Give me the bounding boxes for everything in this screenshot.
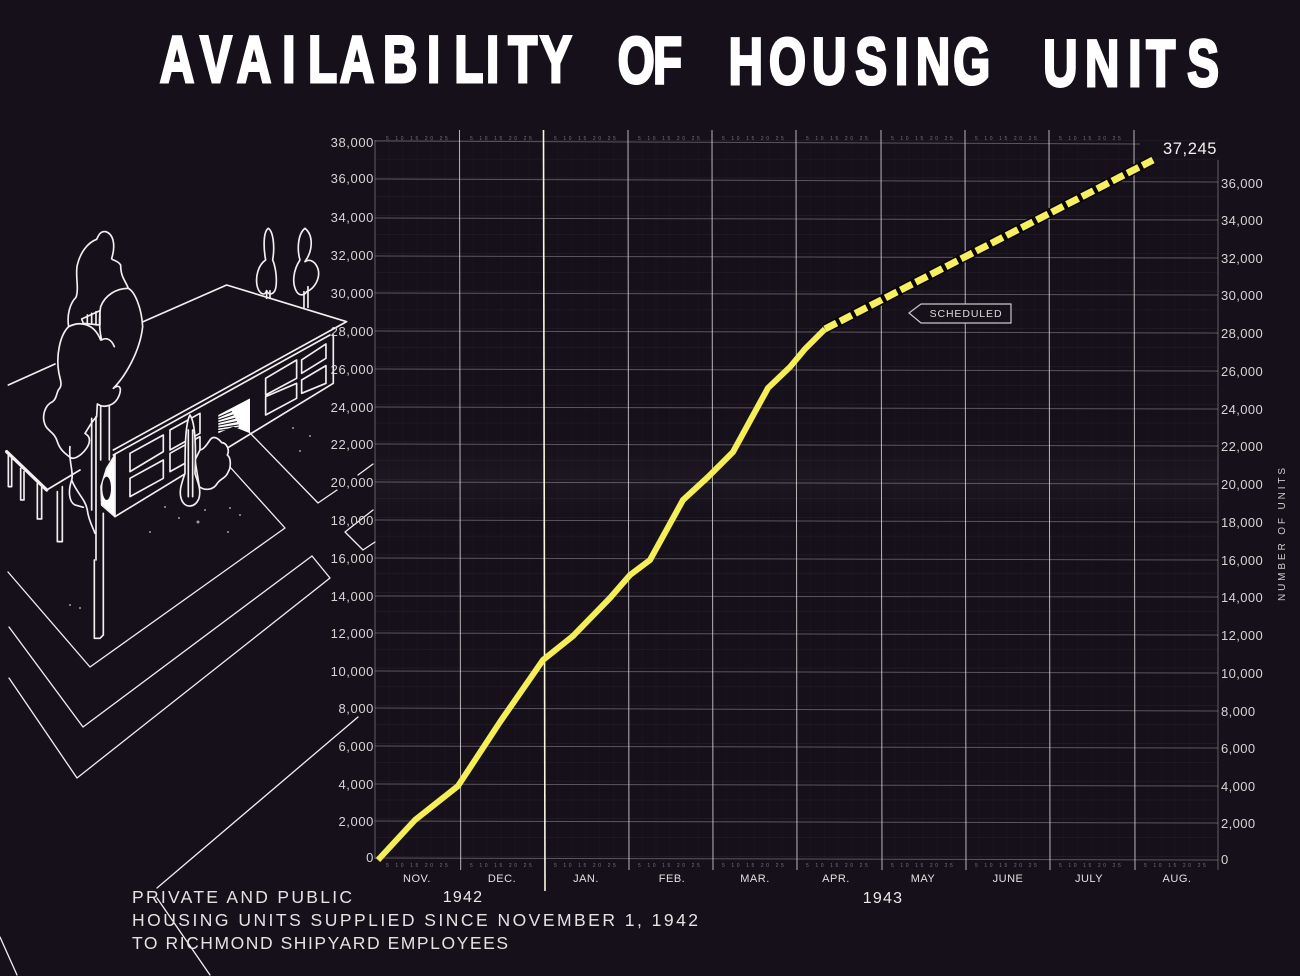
left axis labels: 18,000 <box>331 513 374 528</box>
left axis labels: 4,000 <box>338 777 374 792</box>
right axis labels: 30,000 <box>1221 288 1263 303</box>
caption: HOUSING UNITS SUPPLIED SINCE NOVEMBER 1, 1942 <box>132 910 698 930</box>
top day ticks: 5 10 15 20 25 <box>806 136 870 142</box>
bottom day ticks <box>386 863 1208 869</box>
month labels: JAN. <box>573 873 599 885</box>
title: OF <box>618 24 682 98</box>
right axis labels: 26,000 <box>1221 364 1263 379</box>
end wall <box>101 455 115 517</box>
right axis labels: 32,000 <box>1221 251 1263 266</box>
bottom day ticks: 5 10 15 20 25 <box>1059 863 1123 869</box>
top day ticks: 5 10 15 20 25 <box>891 136 955 142</box>
right axis labels: 6,000 <box>1221 741 1256 756</box>
right axis labels: 10,000 <box>1221 666 1263 681</box>
left axis labels: 8,000 <box>338 701 374 716</box>
right axis labels: 34,000 <box>1221 213 1263 228</box>
top day ticks: 5 10 15 20 25 <box>722 136 786 142</box>
month labels: DEC. <box>488 873 516 885</box>
trunks <box>92 407 109 560</box>
right axis labels: 8,000 <box>1221 704 1256 719</box>
top day ticks: 5 10 15 20 25 <box>554 136 618 142</box>
bottom day ticks: 5 10 15 20 25 <box>470 863 534 869</box>
caption <box>132 887 698 953</box>
month labels: MAY <box>911 873 935 885</box>
bottom day ticks: 5 10 15 20 25 <box>554 863 618 869</box>
month labels: JULY <box>1075 873 1103 885</box>
title: UNITS <box>1043 27 1219 101</box>
top day ticks: 5 10 15 20 25 <box>975 136 1039 142</box>
left axis labels: 28,000 <box>331 324 374 339</box>
right axis labels: 14,000 <box>1221 590 1263 605</box>
year label 1942: 1942 <box>443 889 483 906</box>
left axis labels: 14,000 <box>331 589 374 604</box>
top day ticks: 5 10 15 20 25 <box>470 136 534 142</box>
bottom day ticks: 5 10 15 20 25 <box>891 863 955 869</box>
small tree by door <box>195 437 230 489</box>
top day ticks: 5 10 15 20 25 <box>1059 136 1123 142</box>
title <box>160 23 1219 101</box>
house body <box>7 228 347 638</box>
right axis labels: 20,000 <box>1221 477 1263 492</box>
right axis labels: 4,000 <box>1221 779 1256 794</box>
left axis labels: 10,000 <box>331 664 374 679</box>
eave second line <box>113 335 333 517</box>
actual units line <box>378 329 825 860</box>
month labels: FEB. <box>659 873 685 885</box>
bottom day ticks: 5 10 15 20 25 <box>806 863 870 869</box>
right axis labels: 16,000 <box>1221 553 1263 568</box>
right axis labels: 2,000 <box>1221 816 1256 831</box>
windows <box>130 344 326 497</box>
left axis labels: 24,000 <box>331 400 374 415</box>
left axis labels: 20,000 <box>331 475 374 490</box>
month labels: AUG. <box>1163 873 1191 885</box>
right axis labels: 0 <box>1221 852 1229 867</box>
walkway outlines <box>0 433 375 975</box>
illustration: isometric house with trees and walkways <box>0 228 375 975</box>
title: HOUSING <box>729 25 990 99</box>
roof outline <box>8 285 347 490</box>
left axis labels: 34,000 <box>331 210 374 225</box>
right axis labels: 36,000 <box>1221 176 1263 191</box>
caption: PRIVATE AND PUBLIC <box>132 887 352 907</box>
bottom day ticks: 5 10 15 20 25 <box>386 863 450 869</box>
end wall round opening <box>102 477 111 500</box>
right axis labels: 28,000 <box>1221 326 1263 341</box>
scheduled tag <box>909 304 1011 323</box>
foreground tree canopy <box>44 232 143 458</box>
left axis labels: 12,000 <box>331 626 374 641</box>
left axis labels: 36,000 <box>331 171 374 186</box>
right axis labels: 22,000 <box>1221 439 1263 454</box>
month labels: APR. <box>822 873 850 885</box>
left axis labels: 6,000 <box>338 739 374 754</box>
right axis labels: 24,000 <box>1221 402 1263 417</box>
bottom day ticks: 5 10 15 20 25 <box>638 863 702 869</box>
left axis labels: 32,000 <box>331 248 374 263</box>
caption: TO RICHMOND SHIPYARD EMPLOYEES <box>132 933 508 953</box>
bottom day ticks: 5 10 15 20 25 <box>722 863 786 869</box>
right axis labels: 18,000 <box>1221 515 1263 530</box>
left axis labels: 0 <box>366 850 374 865</box>
month labels <box>403 873 1191 885</box>
left axis labels: 30,000 <box>331 286 374 301</box>
month labels: MAR. <box>740 873 770 885</box>
major horizontal grid lines <box>375 141 1218 860</box>
low shrub around trunk <box>69 447 95 533</box>
fascia and posts <box>7 452 47 490</box>
month grid lines <box>375 130 1218 870</box>
left axis labels: 2,000 <box>338 814 374 829</box>
end value label: 37,245 <box>1163 140 1217 158</box>
minor grid <box>375 140 1218 859</box>
right axis labels <box>1221 176 1263 867</box>
canopy inner lines <box>69 288 128 347</box>
right axis title: NUMBER OF UNITS <box>1277 468 1288 601</box>
back trees <box>257 228 276 294</box>
bottom day ticks: 5 10 15 20 25 <box>1144 863 1208 869</box>
left axis labels <box>331 135 374 865</box>
left axis labels: 16,000 <box>331 551 374 566</box>
trunk base <box>94 560 103 638</box>
left axis labels: 38,000 <box>331 135 374 150</box>
month labels: NOV. <box>403 873 431 885</box>
year label 1943: 1943 <box>863 890 903 907</box>
right axis labels: 12,000 <box>1221 628 1263 643</box>
month labels: JUNE <box>993 873 1023 885</box>
year divider <box>544 130 545 891</box>
bottom day ticks: 5 10 15 20 25 <box>975 863 1039 869</box>
scheduled tag: SCHEDULED <box>930 308 1002 320</box>
chart: housing units over time <box>331 130 1288 907</box>
lawn specks <box>69 427 311 609</box>
left axis labels: 22,000 <box>331 437 374 452</box>
top day ticks <box>386 136 1123 142</box>
top day ticks: 5 10 15 20 25 <box>386 136 450 142</box>
doorway <box>218 398 250 433</box>
left axis labels: 26,000 <box>331 362 374 377</box>
cypress tree <box>180 415 200 506</box>
title: AVAILABILITY <box>160 23 572 97</box>
top day ticks: 5 10 15 20 25 <box>638 136 702 142</box>
scheduled units dashed line <box>825 160 1153 329</box>
